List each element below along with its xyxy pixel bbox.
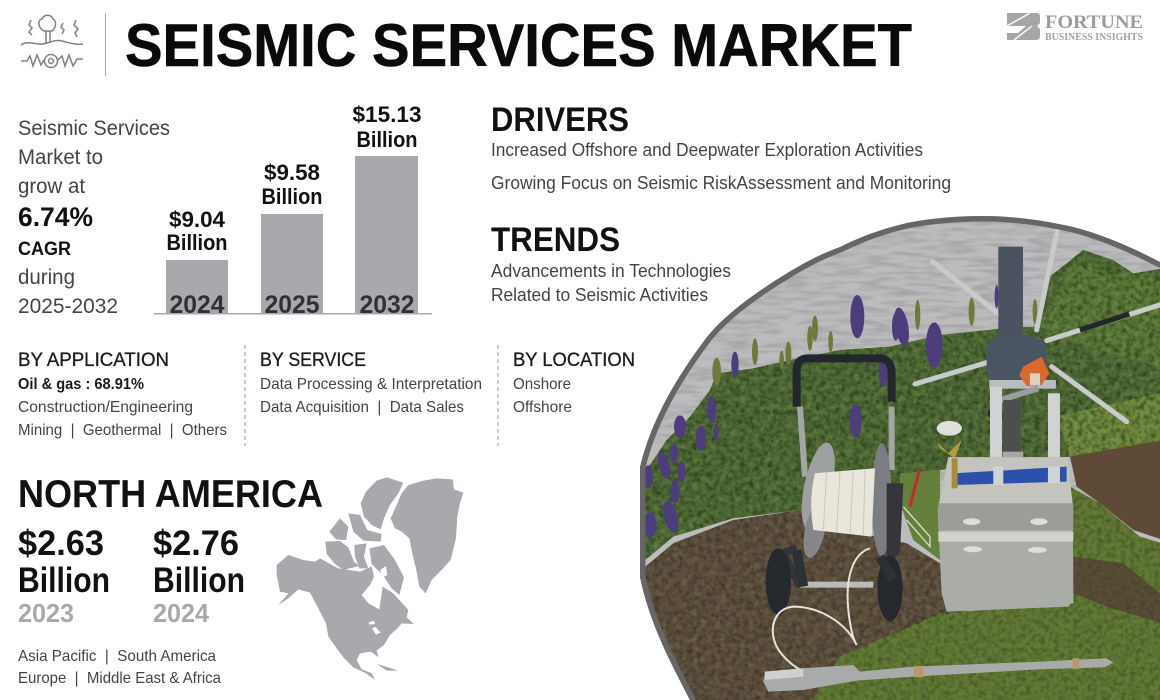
text block: market growth summary: during: [18, 266, 75, 289]
bar chart: market size: [154, 102, 432, 319]
panel: drivers: Increased Offshore and Deepwater Exploration Activities: [491, 140, 923, 160]
panel: north america: Asia Pacific | South America: [18, 648, 216, 665]
bar chart: market size: 2025: [264, 291, 320, 319]
panel: north america: Europe | Middle East & Africa: [18, 670, 221, 687]
panel: trends: Related to Seismic Activities: [491, 285, 708, 305]
hose reel trolley: [797, 358, 892, 407]
instrument column: [998, 247, 1023, 343]
green flower spikes: [712, 298, 1037, 386]
text block: market growth summary: grow at: [18, 175, 85, 198]
control box: [938, 457, 1073, 612]
red clips and cables: [910, 470, 919, 507]
text block: market growth summary: 2025-2032: [18, 295, 118, 318]
panel: by application: Mining | Geothermal | Others: [18, 422, 227, 439]
panel: by application: BY APPLICATION: [18, 350, 169, 371]
title: SEISMIC SERVICES MARKET: [125, 12, 912, 79]
bar chart: market size: $9.58: [264, 160, 320, 185]
text block: market growth summary: 6.74%: [18, 202, 93, 232]
panel: by location: Onshore: [513, 376, 571, 393]
logo: Fortune Business Insights: FORTUNE: [1045, 12, 1143, 33]
bar chart: market size: $15.13: [352, 102, 422, 127]
panel: trends: [491, 221, 731, 305]
panel: north america: [18, 473, 323, 687]
mainland: [277, 555, 414, 680]
bar chart: market size: Billion: [356, 127, 418, 152]
panel: north america: NORTH AMERICA: [18, 473, 323, 516]
text block: market growth summary: CAGR: [18, 239, 71, 260]
panel: trends: Advancements in Technologies: [491, 261, 731, 281]
panel: by service: Data Acquisition | Data Sales: [260, 399, 464, 416]
bar chart: market size: Billion: [166, 230, 228, 255]
panel: by application: Construction/Engineering: [18, 399, 193, 416]
panel: by location: BY LOCATION: [513, 350, 635, 371]
text block: market growth summary: Market to: [18, 146, 103, 169]
panel: north america: 2023: [18, 598, 74, 628]
water: [633, 203, 1160, 700]
purple flowers: [643, 285, 999, 538]
greenland: [391, 478, 463, 593]
panel: drivers: Growing Focus on Seismic RiskAssessment and Monitoring: [491, 173, 951, 193]
panel: north america: Billion: [18, 561, 110, 600]
white hose: [773, 548, 870, 672]
ground: [633, 510, 973, 700]
bar chart: market size: 2024: [170, 291, 225, 319]
panel: north america: $2.63: [18, 524, 104, 563]
reel wheels: [766, 548, 791, 615]
panel: drivers: DRIVERS: [491, 101, 629, 139]
panel: by application: [18, 350, 227, 439]
photo: seismic testing equipment in circular frame: [633, 203, 1160, 700]
panel: trends: TRENDS: [491, 221, 620, 259]
panel: by location: [513, 350, 635, 416]
ellesmere island: [361, 477, 403, 529]
photo ring: [640, 216, 1160, 700]
pressure gauge: [937, 421, 962, 436]
panel: north america: $2.76: [153, 524, 239, 563]
bushes: [633, 250, 1160, 570]
panel: by location: Offshore: [513, 399, 572, 416]
bar chart: market size: Billion: [262, 184, 322, 209]
bar chart: market size: $9.04: [169, 207, 226, 232]
divider: [105, 13, 106, 76]
map: north america: [277, 477, 463, 680]
panel: north america: 2024: [153, 598, 210, 628]
panel: by service: [260, 350, 482, 416]
bar chart: market size: 2032: [360, 291, 414, 319]
panel: by service: Data Processing & Interpretation: [260, 376, 482, 393]
probe rod: [763, 658, 1113, 692]
arctic islands: [329, 518, 348, 540]
radial rods: [915, 231, 1160, 422]
text block: market growth summary: [18, 117, 170, 318]
text block: market growth summary: Seismic Services: [18, 117, 170, 140]
logo: Fortune Business Insights: BUSINESS INSIGHTS: [1045, 32, 1143, 43]
panel: by service: BY SERVICE: [260, 350, 366, 371]
panel: by application: Oil & gas : 68.91%: [18, 376, 144, 393]
panel: drivers: [491, 101, 951, 193]
icon: seismic logo: [21, 15, 83, 68]
panel: north america: Billion: [153, 561, 245, 600]
logo: Fortune Business Insights: [1007, 12, 1143, 43]
